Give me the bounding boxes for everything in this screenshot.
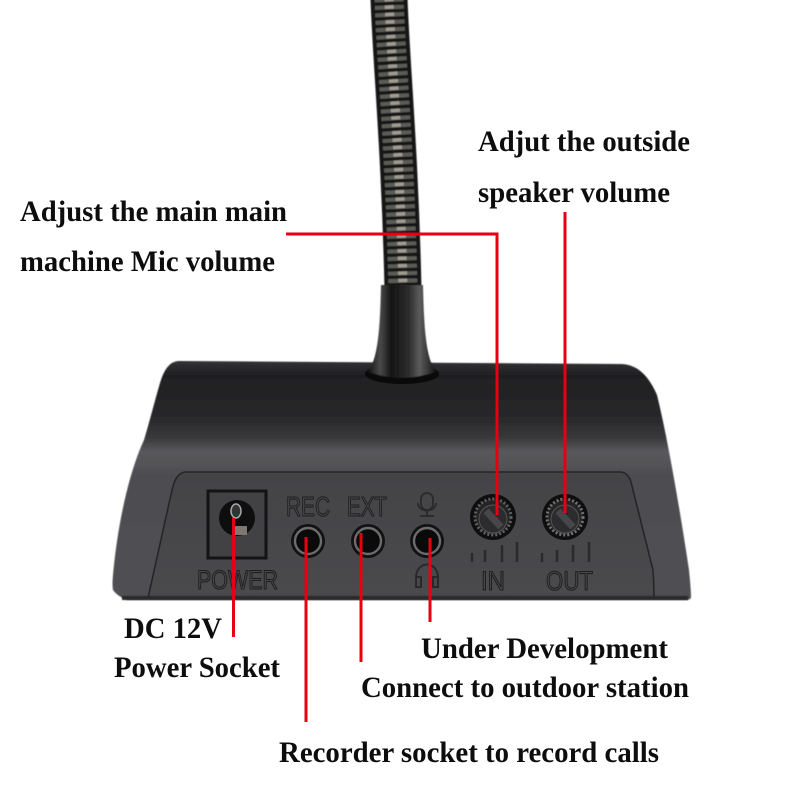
scale marks IN (472, 542, 517, 562)
label POWER: POWER (197, 565, 278, 595)
label EXT: EXT (347, 491, 387, 522)
callout text: main machine mic volume: Adjust the main main (20, 196, 287, 228)
gooseneck (389, 0, 403, 290)
callout lines (234, 212, 565, 722)
callout text: under development: Under Development (421, 633, 668, 665)
housing (112, 361, 691, 600)
callout text: connect to outdoor station: Connect to outdoor station (361, 672, 689, 704)
icon: headphones (416, 564, 438, 587)
jack MIC (410, 524, 444, 558)
line: power socket (232, 518, 235, 637)
callout text: recorder socket: Recorder socket to record calls (279, 737, 659, 769)
icon: microphone (418, 493, 436, 516)
callout text: main machine mic volume: machine Mic volume (20, 246, 275, 278)
line: outdoor station (360, 533, 362, 662)
jack EXT (351, 524, 385, 558)
recessed control panel (148, 472, 654, 598)
callout text: main machine mic volume (20, 196, 287, 278)
label IN: IN (481, 566, 505, 596)
callout text: DC 12V power socket (114, 613, 280, 684)
callout text: outside speaker volume: Adjut the outside (478, 126, 690, 158)
bottom edge (122, 596, 688, 600)
knob IN (470, 494, 516, 540)
callout text: DC 12V power socket: DC 12V (124, 613, 222, 645)
neck collar (365, 285, 439, 384)
callout text: outside speaker volume (478, 126, 690, 209)
line: mic volume (286, 234, 497, 515)
label REC: REC (286, 491, 330, 522)
callout text: DC 12V power socket: Power Socket (114, 652, 280, 684)
jack REC (291, 524, 325, 558)
power socket (208, 491, 266, 558)
callout text: outside speaker volume: speaker volume (478, 177, 670, 209)
knob OUT (542, 494, 588, 540)
line: speaker volume (564, 212, 566, 513)
device body (112, 361, 691, 600)
label OUT: OUT (546, 566, 593, 596)
line: under development (428, 538, 432, 622)
scale marks OUT (542, 542, 589, 562)
line: recorder socket (304, 537, 308, 722)
